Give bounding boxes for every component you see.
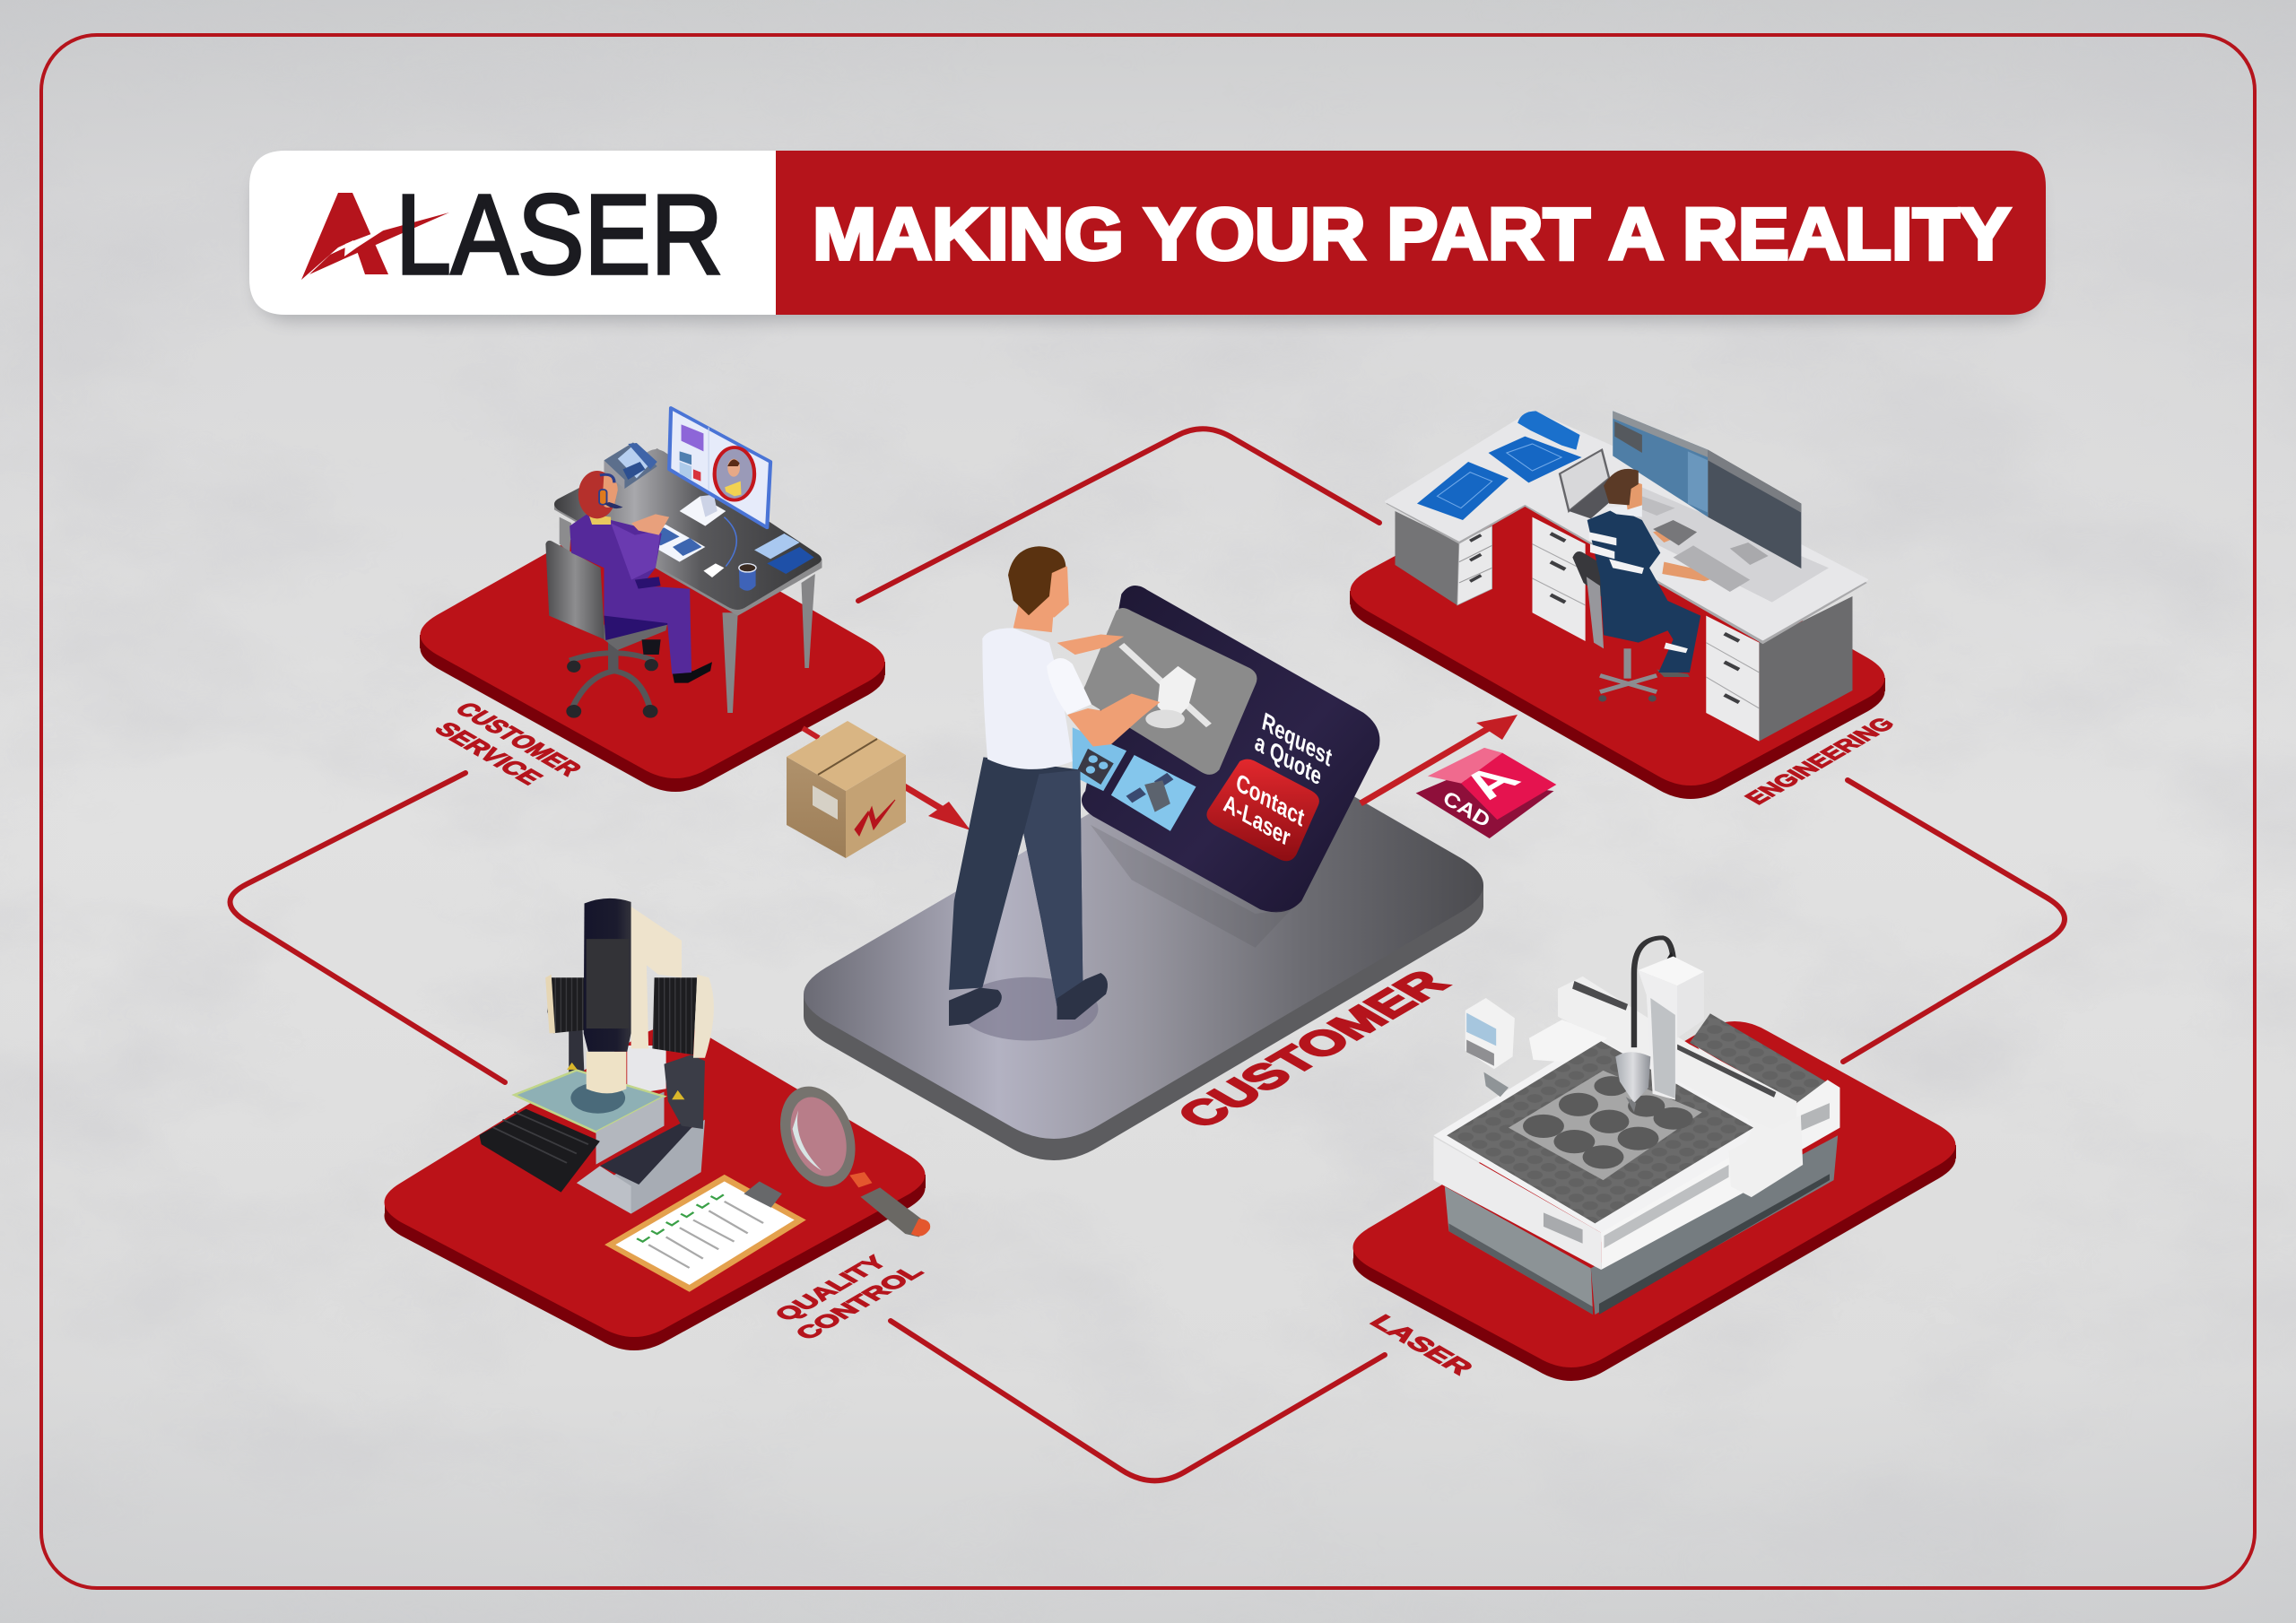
model viewer [1083, 608, 1257, 775]
tablet text: Request a Quote [1253, 707, 1334, 791]
cardboard box [787, 721, 906, 858]
arrow: customer service to customer [803, 728, 970, 830]
platform: customer [804, 741, 1483, 1160]
header banner [249, 151, 2046, 321]
measuring machine [479, 1027, 705, 1214]
control panel [1465, 998, 1515, 1097]
person [949, 546, 1160, 1041]
CAD icon [1416, 748, 1556, 838]
pedestal right [1706, 596, 1852, 742]
magnifying glass [770, 1081, 930, 1237]
tablet shadow [1091, 825, 1292, 948]
label: customer service: CUSTOMER [448, 699, 587, 780]
keyboard [633, 525, 705, 562]
keyboard and mouse [1653, 520, 1750, 592]
platform: customer service [420, 515, 885, 792]
machine frame [1433, 1037, 1801, 1270]
title panel [776, 151, 2046, 315]
logo wordmark: LASER [396, 171, 723, 298]
illustration: engineering desk and engineer [1386, 411, 1867, 742]
machine bellows and uprights [545, 907, 714, 1058]
platform: laser [1352, 1021, 1956, 1381]
laptop [1560, 450, 1620, 518]
title: MAKING YOUR PART A REALITY [813, 194, 2011, 275]
rear dotted bed [1690, 1013, 1827, 1103]
CAD icon label: CAD [1440, 785, 1492, 833]
pedestal left [1395, 511, 1492, 605]
label: laser: LASER [1363, 1311, 1479, 1379]
rear gantry and rail [1529, 976, 1839, 1152]
agent [570, 471, 712, 683]
contact button [1206, 759, 1319, 861]
illustration: laser cutting machine [1433, 938, 1839, 1315]
machine base [1445, 1135, 1838, 1315]
monitors [1613, 411, 1801, 568]
tablet [1073, 586, 1379, 948]
cutting head [1615, 938, 1704, 1112]
engineer and chair [1572, 469, 1719, 702]
arrow: customer to engineering [1361, 715, 1518, 803]
label: customer service: SERVICE [428, 718, 548, 789]
books and mug [703, 517, 814, 591]
label: customer: CUSTOMER [1166, 963, 1460, 1135]
satellite model [1121, 645, 1209, 728]
machine column [584, 898, 631, 1093]
illustration: quality control station [479, 898, 930, 1292]
platform: quality control [384, 1026, 926, 1350]
chair [545, 541, 667, 718]
button text: Contact A-Laser: A-Laser [1222, 788, 1292, 852]
desk [554, 448, 822, 713]
front carriage [1729, 1115, 1803, 1197]
cutting table [1447, 1041, 1753, 1223]
button text: Contact A-Laser: Contact [1234, 768, 1307, 832]
illustration: customer service desk and agent [545, 408, 822, 718]
label: quality control: CONTROL [789, 1262, 929, 1343]
clipboard [604, 1175, 806, 1292]
pedestal middle [1532, 517, 1586, 641]
label: engineering: ENGINEERING [1739, 714, 1900, 808]
monitor [669, 408, 770, 527]
tablet text: Request a Quote: Request [1260, 707, 1334, 772]
button text: Contact A-Laser [1222, 768, 1307, 852]
illustration: customer and touch screen [949, 546, 1556, 1041]
desk top [1386, 413, 1867, 644]
thumbnail satellite [1111, 755, 1196, 831]
connector lines [230, 429, 2065, 1480]
phone [604, 442, 657, 489]
CAD icon letter A: A [1449, 758, 1533, 807]
logo panel [249, 151, 776, 315]
logo mark A [301, 193, 449, 280]
label: quality control: QUALITY [769, 1252, 892, 1324]
blueprints [1417, 411, 1582, 520]
tablet text: Request a Quote: a Quote [1253, 727, 1324, 791]
platform: engineering [1350, 483, 1885, 799]
thumbnail [1073, 727, 1126, 791]
label: quality control [769, 1252, 929, 1343]
